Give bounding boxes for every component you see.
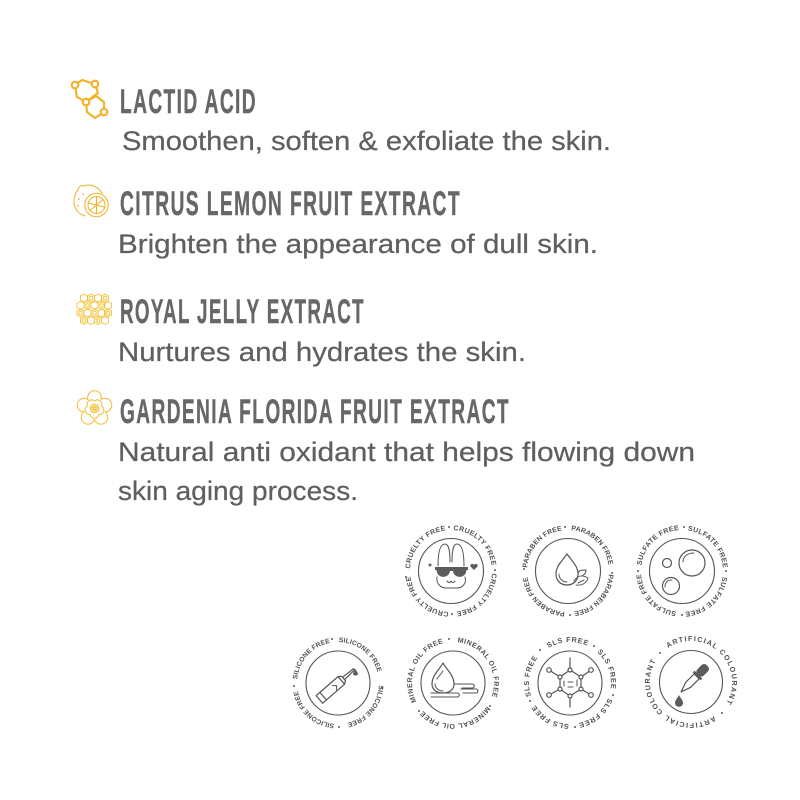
text: citrus lemon description: Brighten the appearance of dull skin. (118, 229, 598, 259)
icon: molecule (72, 80, 107, 118)
badge: sulfate free (636, 525, 728, 617)
badge: sulfate free: SULFATE FREE (637, 525, 679, 565)
icon: lemon (74, 185, 108, 217)
icon: gardenia flower (77, 391, 112, 424)
badge: cruelty free: CRUELTY FREE (406, 526, 446, 568)
badge: cruelty free: CRUELTY FREE (456, 574, 496, 616)
badge: artificial colourant (644, 636, 738, 728)
text: gardenia description: skin aging process. (118, 476, 358, 506)
badge: sulfate free: SULFATE FREE (636, 574, 676, 616)
badge: silicone free: SILICONE FREE (339, 638, 382, 672)
text: royal jelly description: Nurtures and hydrates the skin. (118, 337, 526, 367)
badge: paraben free: PARABEN FREE (522, 577, 564, 616)
badge: artificial colourant: ARTIFICIAL COLOURANT (667, 636, 738, 706)
heading: lactid acid: LACTID ACID (120, 83, 257, 121)
badge: mineral oil free: MINERAL OIL FREE (458, 638, 499, 698)
badge: artificial colourant: ARTIFICIAL COLOURANT (644, 658, 715, 728)
badge: sls free: SLS FREE (532, 705, 569, 729)
text: lactid acid description: Smoothen, soften & exfoliate the skin. (122, 126, 611, 156)
badge: sls free: SLS FREE (598, 650, 616, 688)
badge: paraben free (522, 526, 614, 616)
badge: sulfate free: SULFATE FREE (685, 577, 727, 617)
badge: paraben free: PARABEN FREE (574, 574, 614, 616)
badge: sls free: SLS FREE (579, 698, 612, 728)
badge: sls free: SLS FREE (546, 637, 589, 648)
badge: cruelty free: CRUELTY FREE (406, 576, 448, 616)
badge: cruelty free (405, 526, 496, 616)
badge: sulfate free: SULFATE FREE (688, 526, 728, 568)
text: gardenia description: Natural anti oxidant that helps flowing down (118, 437, 695, 467)
badge: silicone free: SILICONE FREE (294, 691, 334, 728)
text: gardenia description (118, 437, 695, 506)
badge: silicone free: SILICONE FREE (348, 686, 384, 728)
icon: honeycomb (77, 294, 112, 324)
badge: paraben free: PARABEN FREE (522, 526, 562, 568)
heading: citrus lemon fruit extract: CITRUS LEMON FRUIT EXTRACT (120, 185, 461, 223)
badge: silicone free (292, 638, 384, 728)
badge: sls free: SLS FREE (524, 656, 538, 697)
badge: cruelty free: CRUELTY FREE (454, 526, 496, 566)
badge: mineral oil free: MINERAL OIL FREE (407, 638, 443, 703)
badge: mineral oil free: MINERAL OIL FREE (420, 706, 490, 729)
badge: mineral oil free (407, 638, 499, 729)
badge: silicone free: SILICONE FREE (292, 638, 330, 679)
heading: royal jelly extract: ROYAL JELLY EXTRACT (120, 293, 365, 331)
badge: paraben free: PARABEN FREE (572, 526, 614, 565)
badge: sls free (524, 637, 616, 729)
